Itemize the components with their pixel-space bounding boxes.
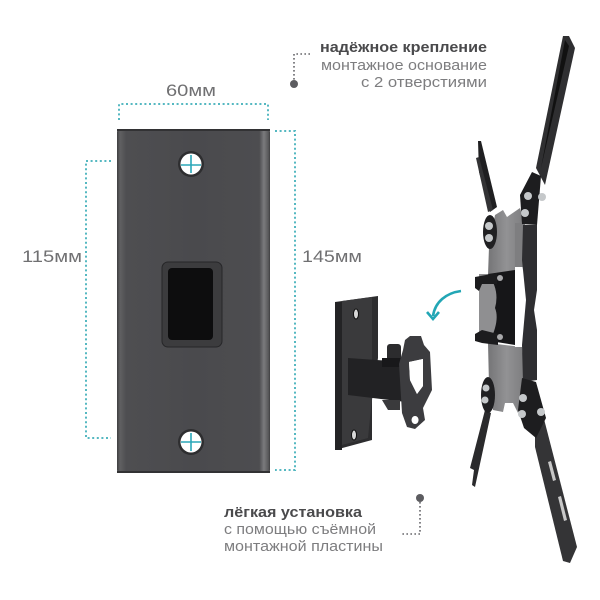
front pivot plate: [399, 336, 432, 429]
upper right arm: [536, 36, 575, 185]
arm: [348, 358, 406, 402]
lower right arm: [535, 419, 577, 563]
centre gray strip between plates: [515, 223, 523, 267]
dimension: 115 mm hole spacing: 115мм: [22, 247, 82, 266]
callout: reliable fastening: монтажное основание: [321, 57, 487, 74]
centre window: [162, 262, 222, 347]
bolts: [382, 344, 402, 410]
wall plate, front view: [117, 129, 270, 473]
central gray plate: lower: [488, 343, 525, 413]
dimension: 145 mm plate height: [275, 131, 362, 470]
hinge knuckles: [481, 172, 546, 438]
callout: easy installation: лёгкая установка: [224, 504, 363, 521]
removable mounting plate: [475, 267, 522, 347]
wall bracket: [335, 296, 432, 450]
callout: reliable fastening: [290, 39, 487, 91]
dimension: 60 mm width: [119, 81, 268, 120]
backplate: [335, 296, 378, 450]
callout: easy installation: с помощью съёмной: [224, 521, 376, 538]
callout: easy installation: [224, 494, 424, 555]
top screw hole: [178, 151, 204, 177]
callout: reliable fastening: с 2 отверстиями: [361, 74, 487, 91]
icon: teal arrow: [427, 291, 461, 319]
bottom screw hole: [178, 429, 204, 455]
upper left arm: [476, 141, 497, 212]
callout: easy installation: монтажной пластины: [224, 538, 383, 555]
right dark rail: [522, 225, 537, 382]
central gray plate: upper: [488, 208, 525, 275]
lower left arm: [470, 410, 491, 487]
dimension: 145 mm plate height: 145мм: [302, 247, 362, 266]
callout: reliable fastening: надёжное крепление: [320, 39, 487, 56]
bolts: [482, 192, 546, 418]
TV mounting bracket: [470, 36, 577, 563]
dimension: 115 mm hole spacing: [22, 161, 111, 438]
dimension: 60 mm width: 60мм: [166, 81, 216, 100]
